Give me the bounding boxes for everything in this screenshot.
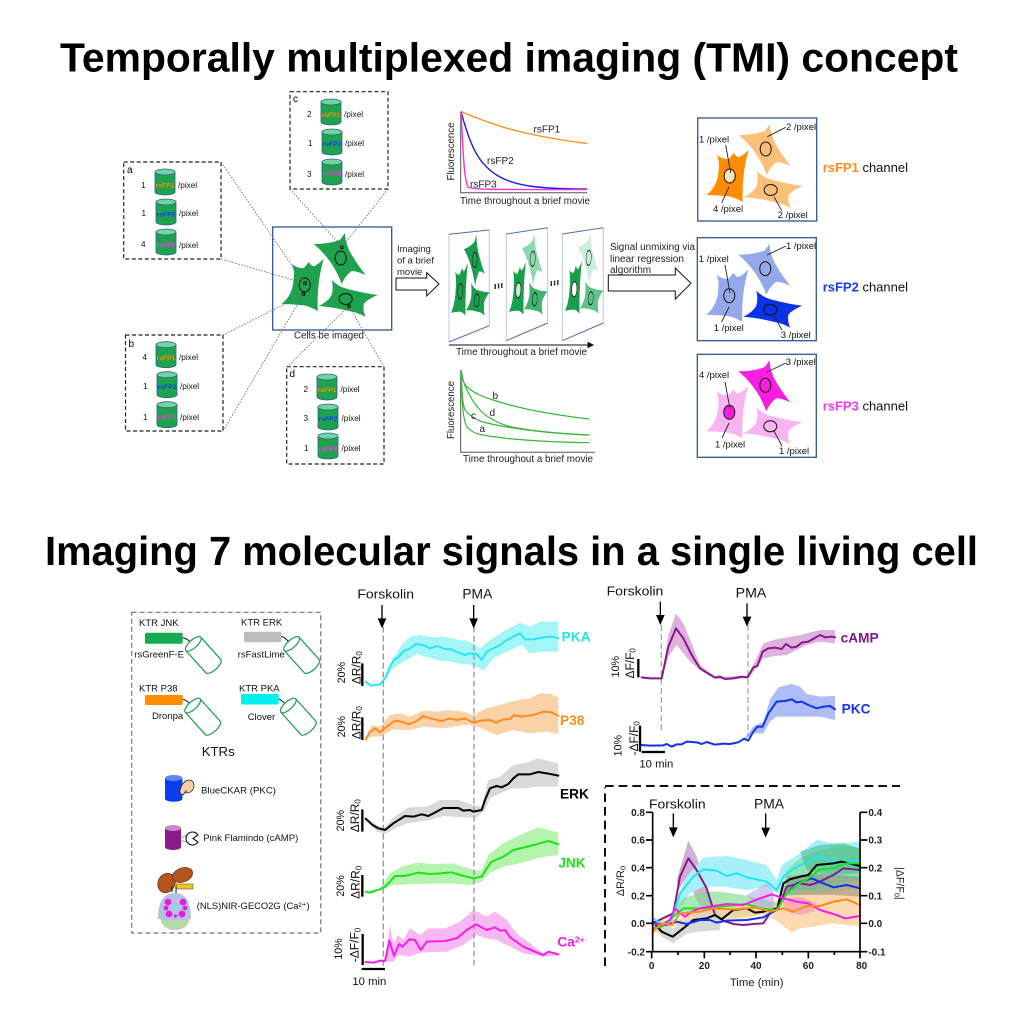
- time axis arrow: [449, 342, 593, 348]
- sensor: KTR P38: [139, 684, 223, 738]
- panel: rsFP2 channel: 1 /pixel: [714, 323, 744, 334]
- panel: rsFP2 channel: 3 /pixel: [781, 330, 811, 341]
- chart: rsFP decay curves: Fluorescence: [446, 122, 457, 180]
- zoom box a: rsFP3: [157, 242, 176, 249]
- x axis labels: 40: [750, 961, 762, 972]
- trace names: [557, 630, 591, 950]
- zoom box c: 2: [307, 110, 312, 119]
- sensor: KTR ERK: [238, 618, 322, 676]
- trace line: JNK: [366, 841, 558, 893]
- x axis labels: 20: [699, 961, 710, 972]
- sensor: KTR PKA: Clover: [248, 712, 275, 723]
- sensor: KTR PKA: KTR PKA: [239, 684, 280, 695]
- left axis title: ΔR/R: [615, 870, 627, 896]
- zoom box a: /pixel: [179, 241, 198, 250]
- panel: cells being imaged with zoomed pixel boxes: [124, 92, 392, 464]
- zoom box a: [124, 162, 221, 259]
- x axis labels: 80: [856, 961, 868, 972]
- right axis title: 0: [893, 893, 902, 897]
- zoom box c: 3: [307, 170, 312, 179]
- box: cells be imaged: [273, 227, 392, 342]
- chart: rsFP decay curves: rsFP2: [487, 156, 514, 167]
- box: cells be imaged: Cells be imaged: [294, 330, 364, 342]
- trace line: PKC: [642, 699, 835, 747]
- right axis labels: 0.0: [868, 919, 883, 930]
- overlay lines: [653, 856, 860, 937]
- zoom box c: 1: [308, 139, 313, 148]
- zoom box d: [287, 367, 384, 464]
- text: imaging of a brief movie: movie: [397, 267, 422, 278]
- left axis labels: 0.0: [631, 919, 645, 930]
- axis scale labels: ΔR/R: [349, 870, 363, 899]
- scale bars: [638, 659, 665, 752]
- ellipsis dots: [494, 280, 558, 289]
- sensor: KTR JNK: rsGreenF-E: [134, 650, 184, 661]
- right axis labels: 0.4: [868, 808, 883, 819]
- panel: movie frames over time: [449, 228, 604, 358]
- right axis labels: 0.3: [868, 836, 883, 847]
- zoom box a: rsFP2: [157, 212, 176, 218]
- arrow: unmixing: [608, 268, 691, 299]
- title: imaging 7 molecular signals: Imaging 7 molecular signals in a single living cell: [45, 528, 978, 574]
- panel: rsFP2 channel: 1 /pixel: [699, 254, 729, 265]
- label: cAMP: cAMP: [841, 630, 879, 645]
- sensor: Pink Flamindo: Pink Flamindo (cAMP): [203, 833, 298, 844]
- chart: rsFP decay curves: rsFP3: [470, 180, 497, 190]
- left axis title: 0: [619, 866, 628, 870]
- zoom box c: rsFP3: [323, 170, 342, 178]
- zoom box d: d: [290, 369, 295, 380]
- zoom box a: a: [127, 165, 133, 176]
- right axis labels: 0.1: [868, 891, 883, 902]
- axis scale labels: ΔR/R: [348, 804, 362, 832]
- right axis title: |ΔF/F: [893, 867, 905, 893]
- axis scale labels: 0: [355, 706, 364, 711]
- treatment arrows: [670, 813, 769, 836]
- right axis title: |: [893, 897, 905, 900]
- zoom box d: 1: [304, 444, 309, 453]
- label: 10 min: 10 min: [639, 759, 673, 771]
- axis scale labels: 10%: [612, 734, 624, 756]
- panel: rsFP3 channel: 1 /pixel: [779, 446, 809, 457]
- axes and ticks: [646, 812, 867, 958]
- axis scale labels: 0: [629, 648, 638, 653]
- zoom box a: 1: [142, 209, 146, 218]
- panel: rsFP1 channel: 2 /pixel: [786, 122, 816, 133]
- treatment arrows: [657, 602, 750, 625]
- zoom box a: 1: [141, 181, 146, 190]
- label: PMA: PMA: [754, 796, 785, 811]
- trace line: calcium: [366, 924, 558, 963]
- chart: pixel fluorescence decay curves: b: [492, 391, 498, 402]
- sensor: KTR P38: Dronpa: [152, 711, 184, 722]
- zoom box b: [126, 335, 223, 431]
- trace names: JNK: [558, 856, 586, 871]
- sensor: KTR JNK: KTR JNK: [139, 618, 179, 629]
- chart: pixel fluorescence decay curves: Fluorescence: [446, 381, 457, 439]
- zoom box c: [290, 92, 388, 189]
- zoom box d: 3: [304, 414, 308, 423]
- zoom box b: 4: [142, 353, 148, 362]
- trace names: P38: [560, 713, 585, 728]
- sensor: Pink Flamindo: [165, 825, 298, 850]
- right axis labels: 0.2: [868, 863, 883, 874]
- trace band: cAMP: [662, 613, 835, 679]
- zoom box b: /pixel: [180, 382, 199, 391]
- sensor: KTR JNK: [134, 618, 223, 676]
- trace line: cAMP: [642, 628, 835, 679]
- axis scale labels: 0: [354, 865, 363, 870]
- panel: rsFP1 channel: 1 /pixel: [699, 135, 729, 146]
- axis scale labels: ΔR/R: [349, 656, 363, 684]
- zoom box c: /pixel: [345, 170, 364, 179]
- trace line: P38: [366, 712, 558, 739]
- zoom box d: 2: [304, 385, 308, 394]
- zoom box d: /pixel: [342, 444, 361, 453]
- left axis labels: -0.2: [628, 947, 645, 958]
- sensor: BlueCKAR: BlueCKAR (PKC): [201, 785, 276, 796]
- sensor: NIR-GECO2G: (NLS)NIR-GECO2G (Ca²⁺): [197, 901, 310, 912]
- sensor: KTR PKA: [239, 684, 318, 738]
- zoom box d: /pixel: [340, 385, 360, 394]
- panel: cAMP and PKC traces: [607, 584, 879, 771]
- zoom box c: rsFP2: [323, 141, 342, 148]
- zoom box b: b: [128, 339, 134, 350]
- right axis labels: [868, 808, 886, 958]
- axis scale labels: ΔF/F: [623, 653, 637, 679]
- x axis title: Time (min): [730, 977, 784, 989]
- zoom box a: 4: [141, 240, 146, 249]
- zoom box a: /pixel: [178, 181, 197, 190]
- panel: rsFP3 channel: 4 /pixel: [699, 370, 729, 381]
- scale bars: [362, 663, 385, 969]
- chart: rsFP decay curves: Time throughout a brief movie: [460, 196, 590, 207]
- axis scale labels: 20%: [336, 715, 348, 737]
- left axis labels: 0.2: [631, 891, 645, 902]
- frame 2: [506, 228, 548, 341]
- zoom box d: /pixel: [342, 414, 361, 423]
- axis scale labels: 10%: [333, 938, 345, 960]
- panel: five stacked KTR traces: [333, 587, 591, 988]
- label: 10 min: 10 min: [352, 976, 386, 988]
- panel: rsFP1 channel: 4 /pixel: [713, 204, 743, 215]
- treatment arrows: [379, 605, 477, 627]
- zoom box b: rsFP3: [158, 414, 177, 421]
- axis scale labels: ΔR/R: [349, 711, 363, 739]
- chart: pixel fluorescence decay curves: c: [471, 411, 476, 422]
- x axis labels: 0: [649, 961, 655, 972]
- axis scale labels: 0: [353, 927, 362, 932]
- label: Forskolin: Forskolin: [607, 584, 663, 599]
- label: Forskolin: Forskolin: [357, 587, 414, 602]
- panel: combined overlay chart: [605, 786, 905, 989]
- trace line: PKA: [366, 633, 558, 686]
- trace band: P38: [366, 693, 558, 740]
- trace band: PKA: [385, 622, 558, 679]
- text: imaging of a brief movie: of a brief: [397, 256, 434, 266]
- trace names: ERK: [560, 786, 589, 801]
- zoom box b: 1: [143, 382, 148, 391]
- label: rsFP3 channel: rsFP3 channel: [823, 399, 908, 414]
- dotted zoom lines: [221, 162, 388, 431]
- label: rsFP1 channel: rsFP1 channel: [823, 160, 908, 175]
- title: temporally multiplexed imaging: Temporally multiplexed imaging (TMI) concept: [60, 34, 958, 80]
- zoom box a: rsFP1: [156, 182, 175, 190]
- chart: pixel fluorescence decay curves: [446, 370, 595, 465]
- axis scale labels: 0: [633, 721, 642, 726]
- axis scale labels: 10%: [610, 655, 622, 677]
- left axis labels: 0.6: [631, 836, 645, 847]
- zoom box c: rsFP1: [322, 112, 341, 119]
- chart: rsFP decay curves: [446, 112, 590, 207]
- panel: rsFP1 channel: [698, 118, 817, 221]
- zoom box b: 1: [143, 413, 148, 422]
- left axis labels: [628, 808, 645, 958]
- axis scale labels: 0: [355, 651, 364, 656]
- axis scale labels: 0: [354, 799, 363, 804]
- zoom box d: rsFP1: [318, 387, 337, 394]
- chart: pixel fluorescence decay curves: d: [490, 408, 495, 419]
- trace band: JNK: [366, 827, 558, 893]
- panel: biosensor legend: [132, 612, 322, 933]
- left axis labels: 0.4: [631, 863, 645, 874]
- text: signal unmixing: algorithm: [610, 265, 651, 276]
- dashed frame: [605, 786, 900, 966]
- arrow: imaging: [396, 273, 439, 296]
- zoom box d: rsFP2: [319, 416, 338, 423]
- panel: rsFP3 channel: 1 /pixel: [715, 440, 745, 451]
- chart: pixel fluorescence decay curves: a: [480, 424, 486, 435]
- sensor: KTR ERK: KTR ERK: [241, 618, 283, 629]
- overlay bands: [653, 840, 860, 943]
- sensor: KTR P38: KTR P38: [139, 684, 178, 695]
- x axis labels: 60: [803, 961, 814, 972]
- zoom box c: /pixel: [344, 110, 363, 119]
- text: signal unmixing: linear regression: [610, 254, 684, 265]
- panel: rsFP2 channel: 1 /pixel: [786, 241, 816, 252]
- axis scale labels: -ΔF/F: [348, 932, 362, 962]
- label: PKC: PKC: [842, 701, 871, 716]
- sensor: KTR ERK: rsFastLime: [238, 650, 285, 661]
- panel: rsFP1 channel: 2 /pixel: [778, 210, 808, 221]
- zoom box d: rsFP3: [319, 446, 338, 453]
- sensor: BlueCKAR: [165, 775, 276, 802]
- axis scale labels: -ΔF/F: [627, 726, 641, 756]
- treatment dashed lines: [661, 625, 748, 737]
- frame 3: [562, 228, 604, 341]
- axis scale labels: [333, 651, 364, 962]
- chart: pixel fluorescence decay curves: Time throughout a brief movie: [463, 454, 593, 465]
- frame 1: [449, 230, 490, 342]
- right axis labels: -0.1: [868, 947, 886, 958]
- text: signal unmixing: Signal unmixing via: [610, 242, 695, 253]
- trace names: PKA: [562, 630, 591, 645]
- axis scale labels: 20%: [336, 661, 348, 683]
- treatment dashed lines: [383, 627, 474, 967]
- axis scale labels: 20%: [335, 875, 347, 897]
- panel: rsFP3 channel: 3 /pixel: [786, 357, 816, 368]
- zoom box b: rsFP2: [158, 384, 177, 391]
- zoom box a: /pixel: [179, 209, 198, 218]
- trace band: ERK: [366, 758, 558, 834]
- sensor: NIR-GECO2G: [155, 865, 310, 930]
- trace band: PKC: [744, 684, 835, 740]
- label: PMA: PMA: [736, 586, 767, 601]
- panel: movie frames over time: Time throughout a brief movie: [456, 347, 587, 358]
- trace line: ERK: [366, 772, 558, 830]
- zoom box b: /pixel: [179, 353, 198, 362]
- label: KTRs: KTRs: [202, 744, 235, 759]
- zoom box b: /pixel: [180, 413, 199, 422]
- label: rsFP2 channel: rsFP2 channel: [823, 280, 908, 295]
- text: imaging of a brief movie: Imaging: [397, 244, 431, 255]
- label: PMA: PMA: [462, 587, 493, 602]
- left axis labels: 0.8: [631, 808, 645, 819]
- label: Forskolin: Forskolin: [649, 796, 706, 811]
- zoom box c: c: [293, 94, 298, 105]
- trace names: Ca: [557, 935, 575, 950]
- chart: rsFP decay curves: rsFP1: [534, 124, 561, 136]
- panel: rsFP3 channel: [697, 354, 816, 457]
- trace names: 2+: [575, 934, 585, 944]
- zoom box b: rsFP1: [157, 355, 176, 362]
- axis scale labels: 20%: [335, 809, 347, 831]
- panel: rsFP2 channel: [697, 238, 816, 341]
- axis scale labels: [610, 648, 642, 756]
- trace band: calcium: [385, 910, 558, 962]
- zoom box c: /pixel: [345, 139, 364, 148]
- x axis labels: [649, 961, 868, 972]
